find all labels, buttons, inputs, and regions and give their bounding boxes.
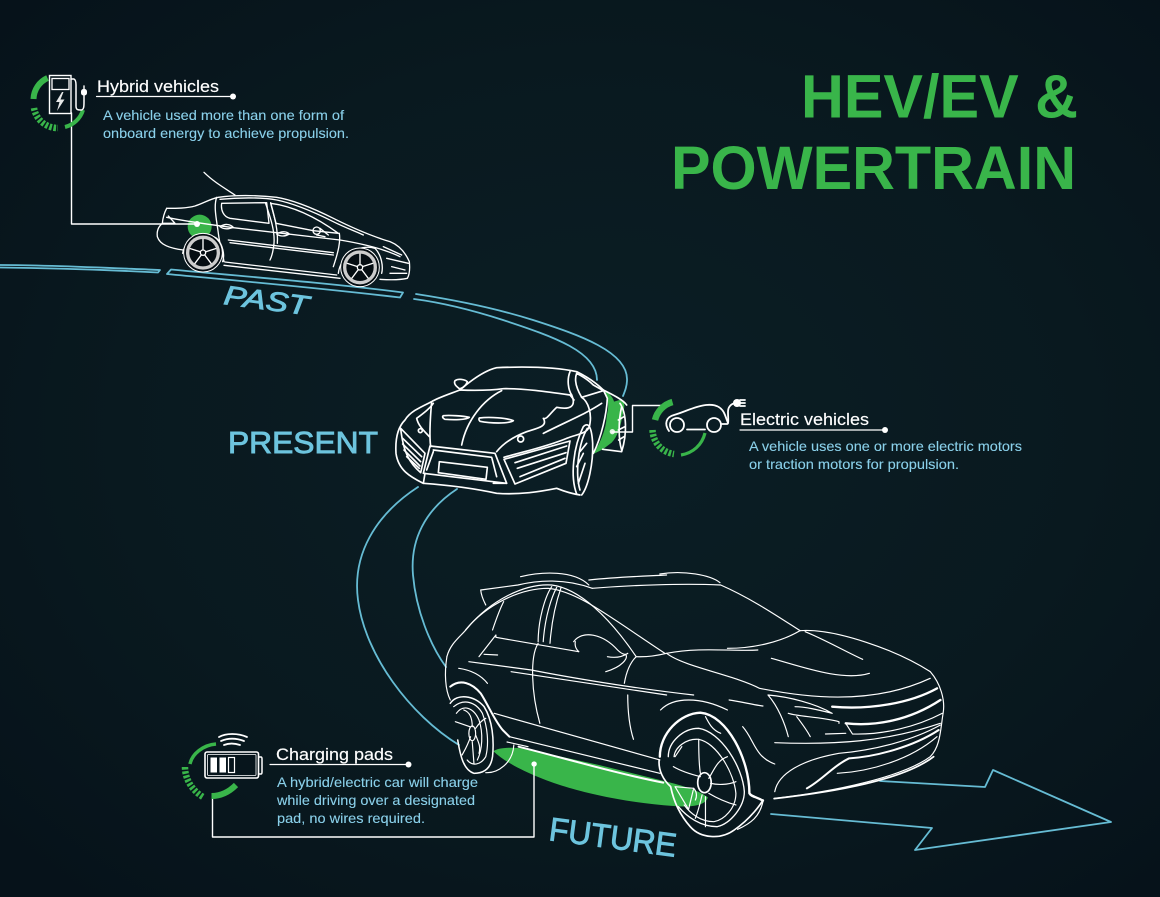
car: future crossover: [445, 573, 944, 837]
leader line: car to electric icon: [612, 406, 661, 432]
callout: hybrid vehicles: onboard energy to achieve propulsion.: [103, 125, 349, 141]
icon: fuel pump charger: [34, 76, 87, 128]
road: timeline path: [0, 265, 1111, 850]
car: present sports car: [396, 367, 627, 495]
green charging pad highlight: [494, 748, 708, 806]
icon: electric car: [652, 399, 745, 455]
callout: hybrid vehicles: [96, 77, 349, 141]
title: [671, 62, 1078, 203]
callout: electric vehicles: [740, 410, 1022, 472]
car: past sedan: [157, 172, 410, 287]
callout: charging pads: Charging pads: [276, 745, 393, 764]
callout: charging pads: pad, no wires required.: [277, 810, 425, 826]
title: POWERTRAIN: [671, 134, 1076, 203]
leader line: hybrid icon to car: [72, 113, 200, 227]
leader line: charging icon to pad: [212, 763, 534, 837]
title: HEV/EV &: [801, 62, 1078, 132]
callout: hybrid vehicles: A vehicle used more than one form of: [103, 107, 344, 123]
callout: electric vehicles: Electric vehicles: [740, 410, 869, 429]
icon: wireless battery: [185, 734, 262, 797]
callout: charging pads: while driving over a designated: [276, 792, 475, 808]
callout: charging pads: [270, 745, 478, 826]
label: future: FUTURE: [547, 810, 679, 864]
callout: charging pads: A hybrid/electric car will charge: [277, 774, 478, 790]
callout: electric vehicles: or traction motors for propulsion.: [749, 456, 959, 472]
label: present: PRESENT: [228, 425, 378, 460]
callout: hybrid vehicles: Hybrid vehicles: [97, 77, 219, 96]
label: past: PAST: [222, 280, 313, 321]
callout: electric vehicles: A vehicle uses one or more electric motors: [749, 438, 1022, 454]
